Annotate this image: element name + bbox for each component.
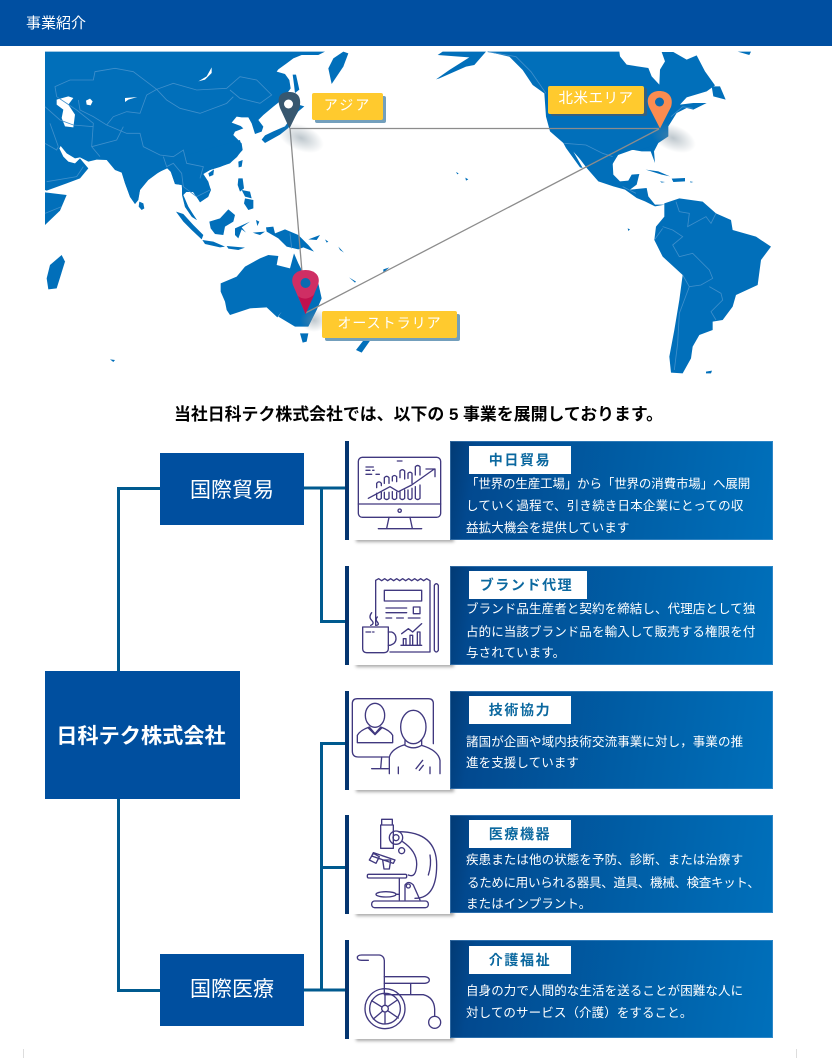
description panel [450, 940, 773, 1038]
description text [466, 602, 755, 660]
card title [469, 696, 571, 724]
description panel [450, 566, 773, 665]
description panel: 占的に当該ブランド品を輸入して販売する権限を付 [466, 625, 755, 639]
header bar [0, 0, 832, 46]
description text [466, 853, 760, 911]
division box: international trade [160, 453, 304, 525]
pin: Asia [279, 92, 300, 128]
company box [45, 671, 240, 799]
card title: ブランド代理 [480, 577, 573, 593]
card title: 医療機器 [489, 826, 551, 842]
division box: international medical: 国際医療 [190, 978, 274, 1001]
map: North America [488, 52, 726, 206]
description panel [450, 691, 773, 789]
description panel [450, 815, 773, 913]
card title: 中日貿易 [489, 452, 551, 468]
label: Australia: オーストラリア [337, 315, 442, 331]
card title [469, 446, 571, 474]
card: technical cooperation [345, 691, 773, 794]
label: Australia [322, 311, 457, 338]
map: inland lakes [57, 67, 212, 127]
connection lines between locations [290, 128, 659, 313]
description panel: 諸国が企画や域内技術交流事業に対し，事業の推 [466, 735, 743, 749]
icon: microscope [350, 815, 450, 914]
pin: North America [648, 91, 672, 128]
map: India [115, 160, 170, 204]
map: Asia and Africa horn [45, 52, 348, 362]
world map with locations [44, 51, 771, 374]
description text [466, 477, 750, 535]
description panel: 対してのサービス（介護）をすること。 [466, 1006, 692, 1020]
description panel: 疾患または他の状態を予防、診断、または治療す [466, 853, 743, 867]
division box: international medical [160, 954, 304, 1026]
label: North America [548, 86, 644, 114]
icon: monitor with chart [350, 441, 450, 540]
map: country borders [45, 68, 292, 248]
icon: newspaper and coffee [350, 566, 450, 665]
description panel: 与されています。 [466, 646, 565, 660]
description text [466, 735, 743, 770]
description panel [450, 441, 773, 540]
card: China-Japan trade [345, 441, 773, 544]
org chart connector lines [117, 486, 345, 992]
map: Southeast Asia and Oceania [176, 178, 389, 353]
page frame ticks [23, 1049, 797, 1058]
map: southern China and Indochina [167, 140, 242, 220]
map: Japan and Sakhalin [262, 75, 304, 143]
description panel: ブランド品生産者と契約を締結し、代理店として独 [466, 602, 755, 616]
header title: 事業紹介 [26, 15, 86, 32]
map: Alaska and South America [436, 52, 771, 373]
description panel: 益拡大機会を提供しています [466, 521, 629, 535]
description panel: 進を支援しています [466, 756, 579, 770]
description panel: るために用いられる器具、道具、機械、検査キット、 [467, 876, 760, 890]
description text [466, 984, 743, 1020]
card title: 介護福祉 [489, 952, 551, 968]
map: United States and Mexico [545, 95, 668, 180]
card: medical devices [345, 815, 773, 918]
card: nursing care welfare [345, 940, 773, 1043]
company box: 日科テク株式会社 [56, 725, 226, 748]
intro heading: 当社日科テク株式会社では、以下の 5 事業を展開しております。 [174, 405, 663, 424]
card title [469, 946, 571, 974]
pin: Australia [292, 270, 319, 314]
description panel: 自身の力で人間的な生活を送ることが困難な人に [466, 984, 743, 998]
card: brand agency [345, 566, 773, 669]
label: Asia: アジア [324, 97, 371, 113]
description panel: 「世界の生産工場」から「世界の消費市場」へ展開 [466, 477, 750, 491]
label: Asia [312, 93, 383, 120]
division box: international trade: 国際貿易 [190, 479, 274, 502]
icon: video conference [350, 691, 450, 790]
description panel: またはインプラント。 [466, 897, 591, 911]
description panel: していく過程で、引き続き日本企業にとっての収 [466, 499, 744, 513]
card title: 技術協力 [489, 702, 551, 718]
label: North America: 北米エリア [558, 91, 634, 107]
icon: wheelchair [350, 940, 450, 1039]
card title [469, 820, 571, 848]
pin shadows [274, 117, 700, 332]
card title [469, 571, 587, 599]
